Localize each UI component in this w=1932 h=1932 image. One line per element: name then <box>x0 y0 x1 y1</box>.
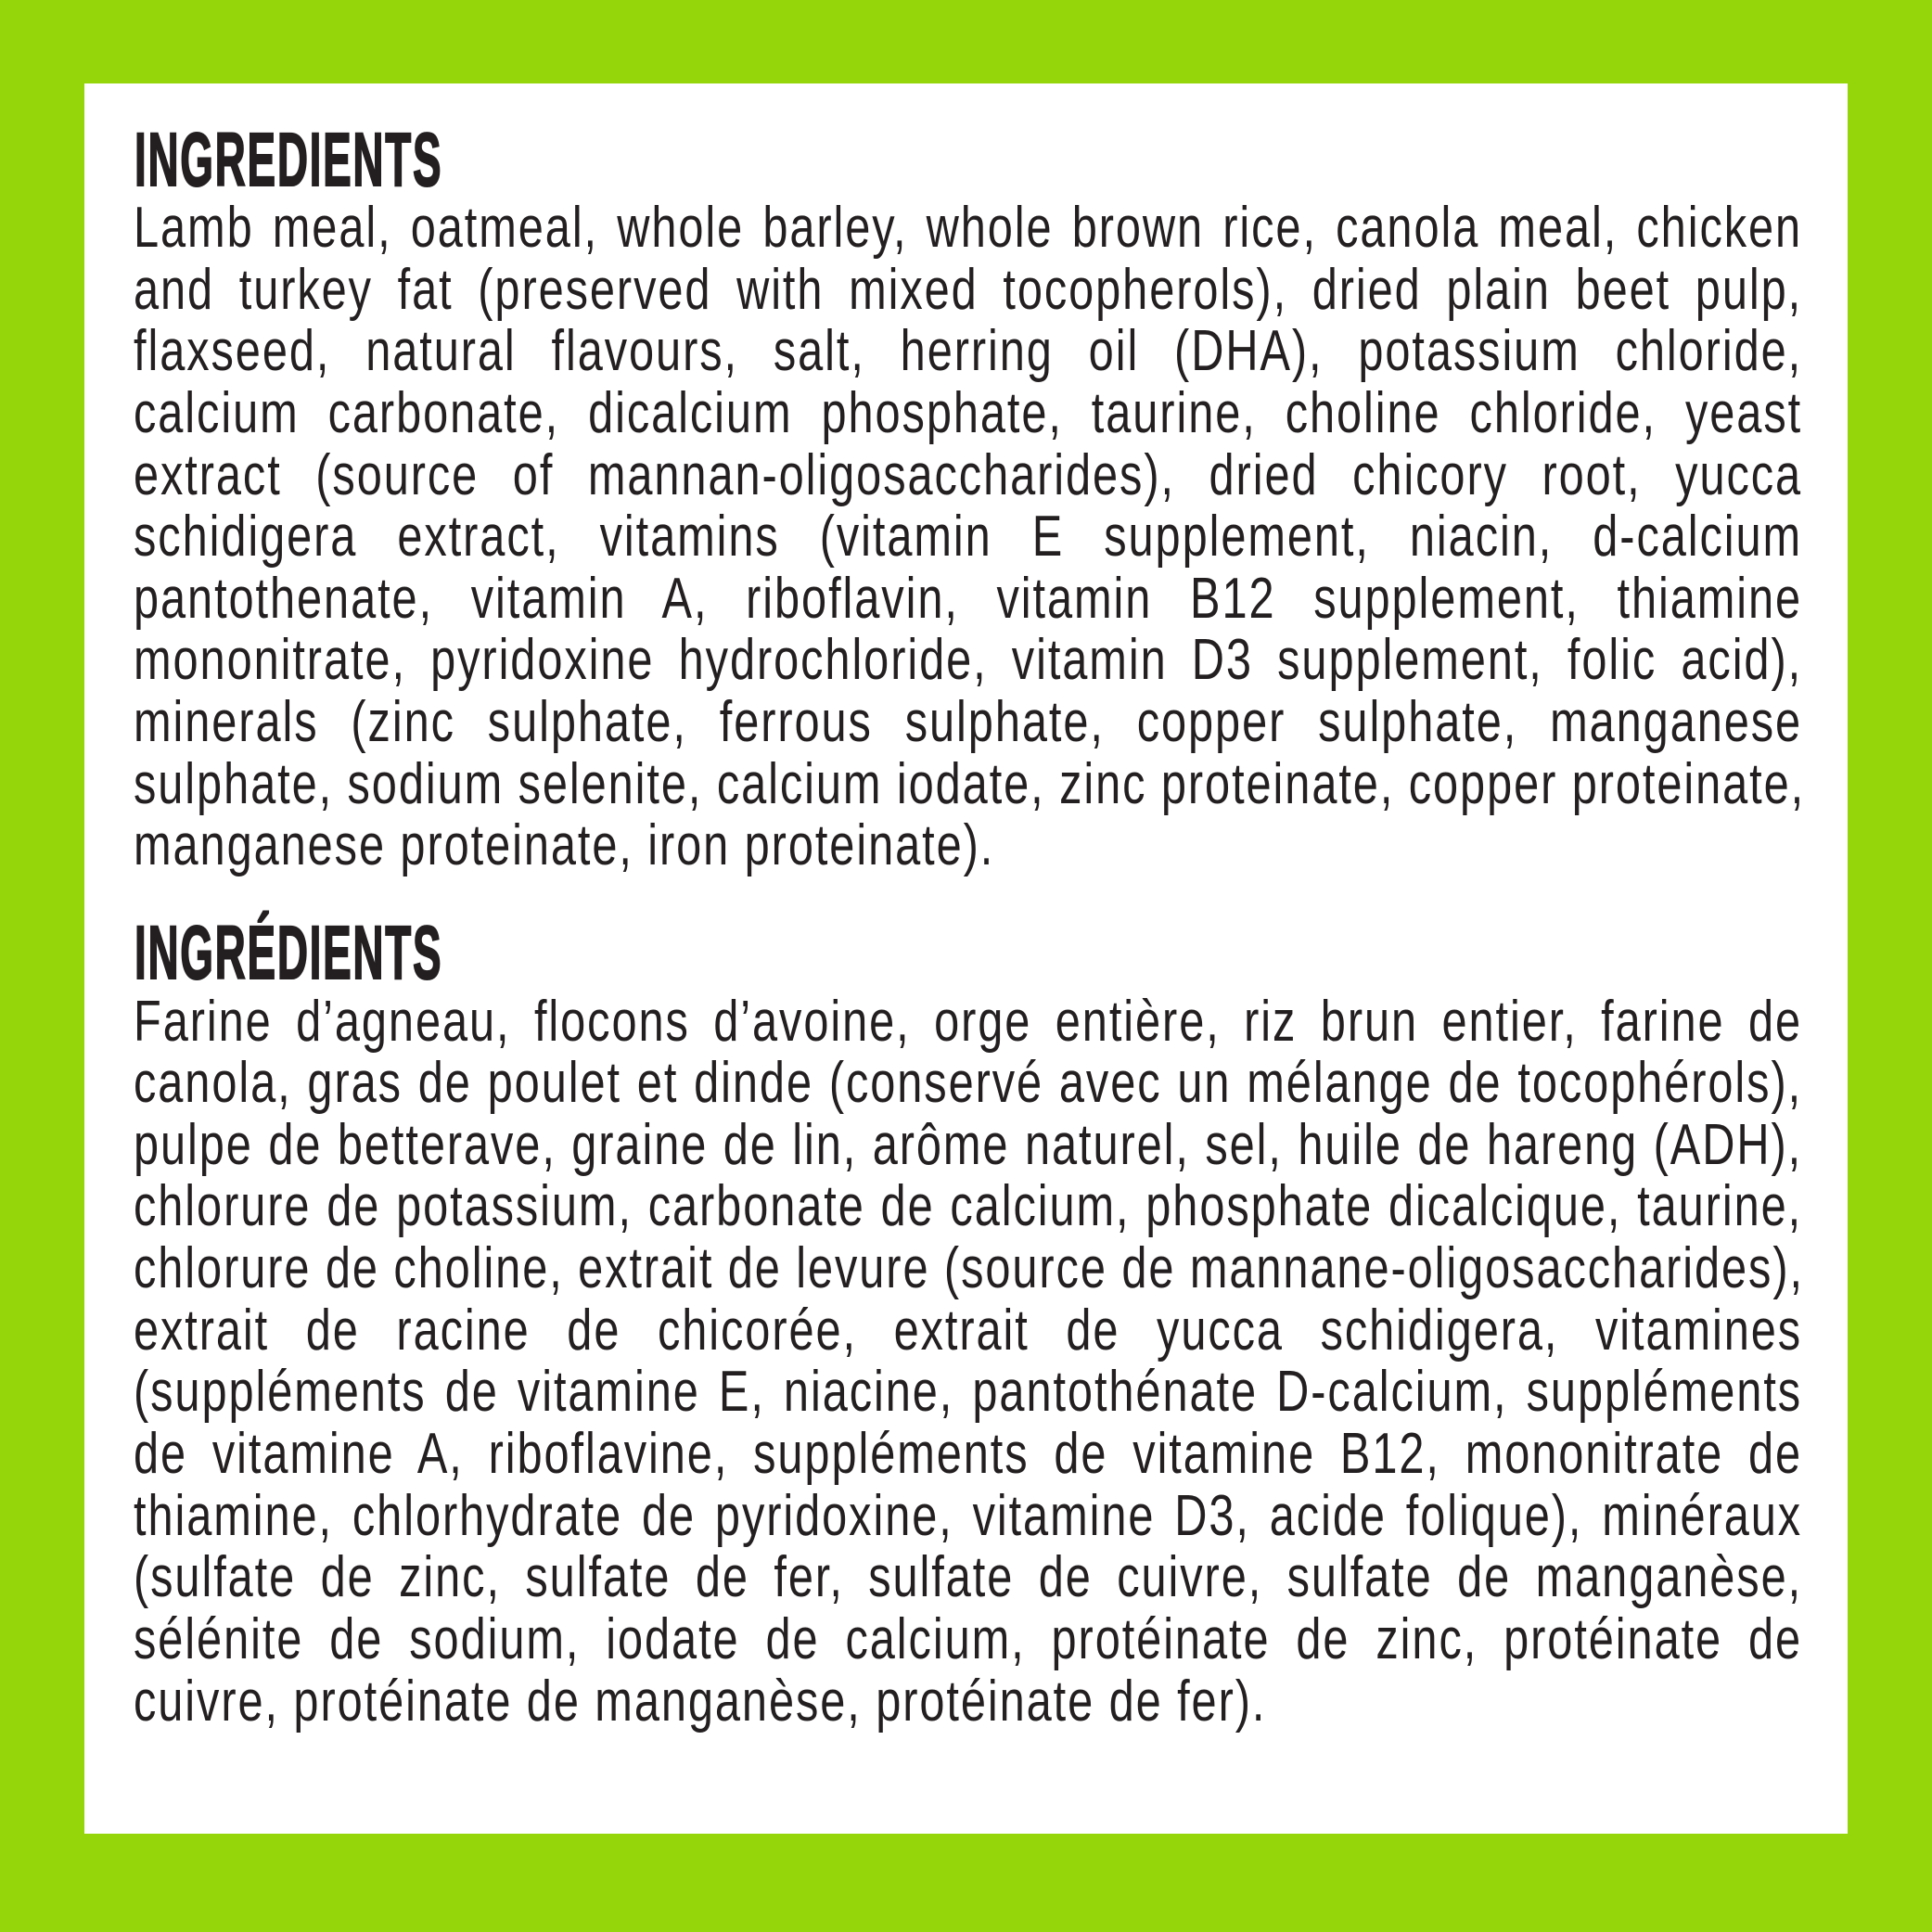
text block: English ingredients list <box>134 195 1805 877</box>
text block: English ingredients list: calcium carbonate, dicalcium phosphate, taurine, choline chloride, yeast <box>134 380 1802 445</box>
text block: English ingredients list: pantothenate, vitamin A, riboflavin, vitamin B12 supplement, thiamine <box>134 566 1802 631</box>
text block: English ingredients list: minerals (zinc sulphate, ferrous sulphate, copper sulphate, manganese <box>134 689 1802 754</box>
text block: English ingredients list: manganese proteinate, iron proteinate). <box>134 812 994 877</box>
heading: French ingredients: INGRÉDIENTS <box>134 911 442 995</box>
text block: French ingredients list: sélénite de sodium, iodate de calcium, protéinate de zinc, protéinate de <box>134 1606 1802 1671</box>
heading: English ingredients: INGREDIENTS <box>134 117 442 202</box>
text block: French ingredients list: extrait de racine de chicorée, extrait de yucca schidigera, vitamines <box>134 1298 1802 1363</box>
text block: French ingredients list: chlorure de choline, extrait de levure (source de mannane-oligosaccharides), <box>134 1235 1804 1300</box>
text block: French ingredients list: chlorure de potassium, carbonate de calcium, phosphate dicalcique, taurine, <box>134 1173 1802 1238</box>
text block: French ingredients list: (sulfate de zinc, sulfate de fer, sulfate de cuivre, sulfate de manganèse, <box>134 1544 1802 1609</box>
text block: English ingredients list: sulphate, sodium selenite, calcium iodate, zinc proteinate, copper proteinate, <box>134 751 1805 816</box>
text block: English ingredients list: extract (source of mannan-oligosaccharides), dried chicory root, yucca <box>134 442 1802 507</box>
text block: English ingredients list: schidigera extract, vitamins (vitamin E supplement, niacin, d-calcium <box>134 504 1802 569</box>
text block: French ingredients list: cuivre, protéinate de manganèse, protéinate de fer). <box>134 1669 1266 1734</box>
text block: French ingredients list: Farine d’agneau, flocons d’avoine, orge entière, riz brun entier, farine de <box>134 989 1802 1054</box>
text block: French ingredients list: de vitamine A, riboflavine, suppléments de vitamine B12, mononitrate de <box>134 1421 1802 1486</box>
text block: English ingredients list: mononitrate, pyridoxine hydrochloride, vitamin D3 supplement, folic acid), <box>134 627 1802 692</box>
text block: French ingredients list: (suppléments de vitamine E, niacine, pantothénate D-calcium, suppléments <box>134 1359 1802 1424</box>
text block: French ingredients list: thiamine, chlorhydrate de pyridoxine, vitamine D3, acide folique), minéraux <box>134 1483 1802 1548</box>
text block: English ingredients list: flaxseed, natural flavours, salt, herring oil (DHA), potassium chloride, <box>134 318 1802 383</box>
text block: French ingredients list <box>134 989 1804 1734</box>
text block: French ingredients list: pulpe de betterave, graine de lin, arôme naturel, sel, huile de hareng (ADH), <box>134 1112 1802 1177</box>
text block: French ingredients list: canola, gras de poulet et dinde (conservé avec un mélange de tocophérols), <box>134 1050 1802 1115</box>
text block: English ingredients list: Lamb meal, oatmeal, whole barley, whole brown rice, canola meal, chicken <box>134 195 1802 260</box>
text block: English ingredients list: and turkey fat (preserved with mixed tocopherols), dried plain beet pulp, <box>134 257 1802 322</box>
